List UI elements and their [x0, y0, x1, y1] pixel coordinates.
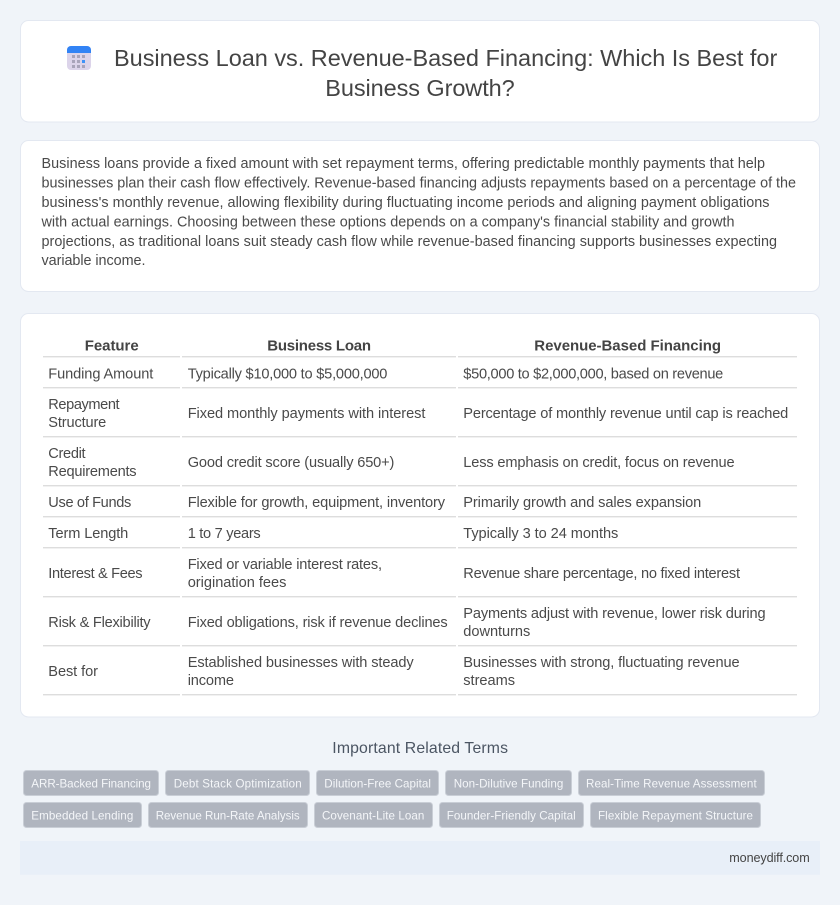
row: repayment structure: Repayment	[48, 397, 120, 413]
row: funding amount: Typically $10,000 to $5,000,000	[188, 366, 387, 382]
table header row: Revenue-Based Financing	[534, 338, 721, 355]
panel: header	[20, 20, 820, 122]
tag: Non-Dilutive Funding: Non-Dilutive Funding	[454, 777, 563, 790]
tag: Debt Stack Optimization: Debt Stack Optimization	[174, 777, 302, 790]
row: best for	[48, 655, 740, 689]
row: best for: streams	[463, 673, 515, 689]
tag: Flexible Repayment Structure: Flexible Repayment Structure	[598, 809, 753, 822]
row: risk and flexibility: downturns	[463, 624, 530, 640]
row: risk and flexibility: Payments adjust with revenue, lower risk during	[463, 606, 766, 622]
table header row: Feature	[85, 338, 139, 355]
tag: Real-Time Revenue Assessment: Real-Time Revenue Assessment	[586, 777, 757, 790]
row: interest and fees: Interest & Fees	[48, 566, 143, 582]
heading: important related terms: Important Related Terms	[332, 740, 508, 757]
row: use of funds: Use of Funds	[48, 495, 131, 511]
row: credit requirements: Good credit score (usually 650+)	[188, 455, 394, 471]
row: risk and flexibility: Risk & Flexibility	[48, 615, 151, 631]
tag: Embedded Lending	[24, 802, 142, 828]
row: risk and flexibility: Fixed obligations, risk if revenue declines	[188, 615, 448, 631]
tag: Dilution-Free Capital	[316, 770, 438, 796]
tag: Founder-Friendly Capital: Founder-Friendly Capital	[447, 809, 576, 822]
icon: calendar	[67, 46, 91, 70]
row: interest and fees: origination fees	[188, 575, 286, 591]
row: repayment structure: Percentage of monthly revenue until cap is reached	[463, 406, 788, 422]
tag: Embedded Lending: Embedded Lending	[31, 809, 133, 822]
row: interest and fees: Fixed or variable interest rates,	[188, 557, 382, 573]
row: best for: income	[188, 673, 234, 689]
tag: Dilution-Free Capital: Dilution-Free Capital	[324, 777, 431, 790]
row: credit requirements: Less emphasis on credit, focus on revenue	[463, 455, 735, 471]
title	[114, 45, 777, 101]
text block: introduction paragraph: Business loans provide a fixed amount with set repayment terms, offering predictable monthly payments that help	[42, 156, 765, 172]
row: risk and flexibility	[48, 606, 766, 640]
tag: Real-Time Revenue Assessment	[578, 770, 764, 796]
row: credit requirements: Credit	[48, 446, 86, 462]
tag: Non-Dilutive Funding	[446, 770, 572, 796]
title: Business Loan vs. Revenue-Based Financing: Which Is Best for	[114, 45, 777, 71]
text block: introduction paragraph: with actual earnings. Choosing between these options depends on a company's financial stability and growth	[40, 214, 734, 230]
row: interest and fees: Revenue share percentage, no fixed interest	[463, 566, 740, 582]
row: funding amount: Funding Amount	[48, 366, 153, 382]
row: use of funds: Primarily growth and sales expansion	[463, 495, 701, 511]
tag: ARR-Backed Financing	[24, 770, 158, 796]
panel: introduction	[20, 140, 820, 292]
row: best for: Businesses with strong, fluctuating revenue	[463, 655, 740, 671]
text block: introduction paragraph: projections, as traditional loans suit steady cash flow while revenue-based financing supports businesses expecting	[42, 234, 777, 250]
text block: introduction paragraph: businesses plan their cash flow effectively. Revenue-based financing adjusts repayments based on a percentage of the	[42, 175, 796, 191]
row: repayment structure: Structure	[48, 415, 106, 431]
row: use of funds: Flexible for growth, equipment, inventory	[188, 495, 446, 511]
tag: Revenue Run-Rate Analysis	[148, 802, 308, 828]
tag: ARR-Backed Financing: ARR-Backed Financing	[31, 777, 151, 790]
text block: introduction paragraph	[40, 156, 796, 269]
tag: Covenant-Lite Loan	[314, 802, 432, 828]
panel: comparison table	[20, 314, 820, 717]
footer bar	[20, 841, 820, 875]
related term tags	[24, 770, 764, 828]
footer bar: moneydiff.com	[729, 851, 810, 865]
tag: Flexible Repayment Structure	[590, 802, 760, 828]
row: repayment structure	[48, 397, 788, 431]
row: term length: 1 to 7 years	[188, 526, 261, 542]
row: term length: Typically 3 to 24 months	[463, 526, 618, 542]
tag: Founder-Friendly Capital	[440, 802, 584, 828]
tag: Covenant-Lite Loan: Covenant-Lite Loan	[322, 809, 424, 822]
row: funding amount	[48, 366, 723, 382]
text block: introduction paragraph: business's monthly revenue, allowing flexibility during fluctuating income periods and aligning payment obligations	[42, 195, 770, 211]
title: Business Growth?	[325, 75, 515, 101]
row: credit requirements	[48, 446, 735, 480]
table header row: Business Loan	[267, 338, 371, 355]
text block: introduction paragraph: variable income.	[42, 253, 146, 269]
tag: Revenue Run-Rate Analysis: Revenue Run-Rate Analysis	[156, 809, 300, 822]
row: use of funds	[48, 495, 701, 511]
row: credit requirements: Requirements	[48, 464, 137, 480]
row: funding amount: $50,000 to $2,000,000, based on revenue	[463, 366, 723, 382]
table header row	[85, 338, 721, 355]
row: interest and fees	[48, 557, 740, 591]
tag: Debt Stack Optimization	[166, 770, 310, 796]
row: term length	[48, 526, 618, 542]
row: repayment structure: Fixed monthly payments with interest	[188, 406, 425, 422]
row: term length: Term Length	[48, 526, 128, 542]
row: best for: Established businesses with steady	[188, 655, 414, 671]
row: best for: Best for	[48, 664, 98, 680]
